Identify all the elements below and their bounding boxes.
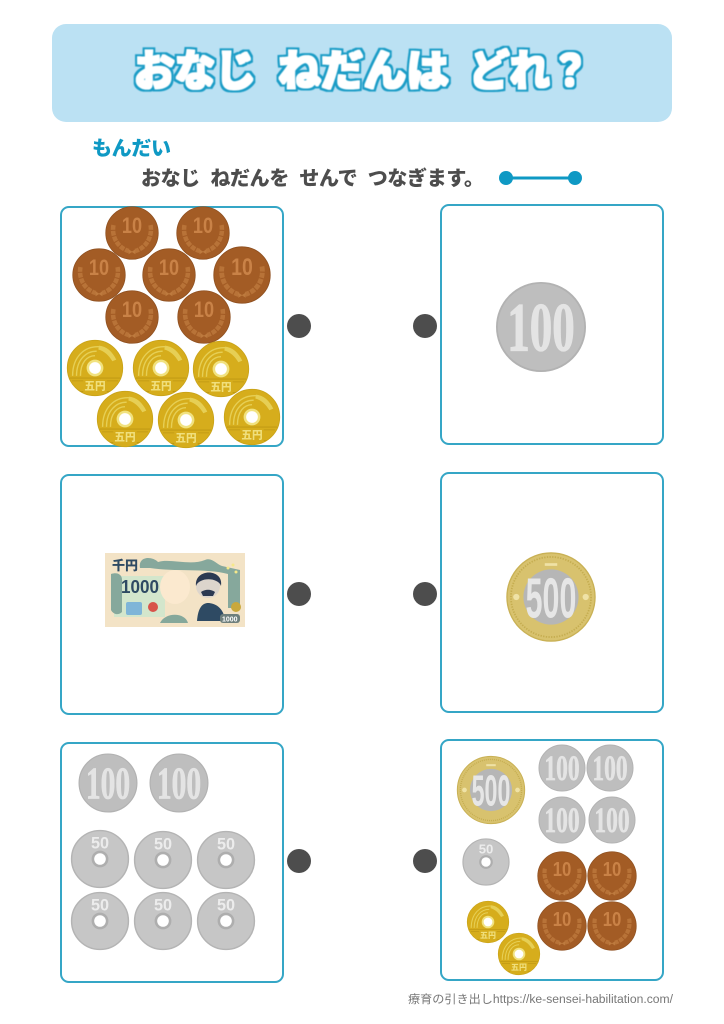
coin: 50 yen: 50: [91, 897, 109, 915]
title: おなじ: [134, 48, 256, 96]
coin: 10 yen: 10: [194, 297, 214, 322]
coin: 50 yen: [463, 839, 509, 885]
panel: 100 and 50 yen coins: [61, 743, 283, 982]
coin: 50 yen: [198, 893, 254, 949]
coin: 10 yen: [538, 852, 586, 900]
connection dot: [413, 582, 437, 606]
coin: 10 yen: 10: [231, 254, 253, 281]
coin: 10 yen: 10: [89, 255, 109, 280]
panel: 100 yen coin: [441, 205, 663, 444]
footer credit: 療育の引き出しhttps://ke-sensei-habilitation.com/: [408, 992, 674, 1006]
coin: 100 yen: 100: [594, 801, 630, 840]
coin: 50 yen: 50: [91, 835, 109, 853]
coin: 50 yen: 50: [154, 836, 172, 854]
title: ？: [551, 48, 589, 96]
coin: 500 yen: 500: [472, 768, 510, 816]
coin: 5 yen: 五円: [114, 432, 136, 444]
coin: 10 yen: 10: [603, 908, 621, 931]
coin: 5 yen: [498, 933, 540, 975]
coin: 10 yen: [538, 902, 586, 950]
coin: 10 yen: 10: [193, 213, 213, 238]
banknote: 1000 yen: 1000: [121, 577, 159, 597]
coin: 5 yen: 五円: [210, 382, 232, 394]
coin: 5 yen: 五円: [241, 430, 263, 442]
coin: 100 yen: 100: [544, 801, 580, 840]
coin: 10 yen: [106, 291, 158, 343]
coin: 50 yen: 50: [154, 897, 172, 915]
connection dot: [413, 849, 437, 873]
connection dot: [287, 849, 311, 873]
connection dot: [287, 582, 311, 606]
coin: 10 yen: 10: [603, 858, 621, 881]
title: どれ: [469, 48, 550, 96]
coin: 5 yen: [193, 341, 249, 397]
coin: 50 yen: [135, 893, 191, 949]
panel: 10 and 5 yen coins: [61, 207, 283, 448]
coin: 5 yen: [67, 340, 123, 396]
banknote: 1000 yen: [105, 553, 245, 627]
coin: 5 yen: 五円: [175, 433, 197, 445]
title banner: [52, 24, 672, 122]
coin: 10 yen: 10: [553, 858, 571, 881]
banknote: 1000 yen: 千円: [112, 558, 138, 573]
coin: 500 yen: [507, 553, 595, 641]
panel: 500 yen coin: [441, 473, 663, 712]
coin: 5 yen: [224, 389, 280, 445]
coin: 10 yen: 10: [159, 255, 179, 280]
coin: 100 yen: 100: [592, 749, 628, 788]
connection dot: [287, 314, 311, 338]
coin: 10 yen: [106, 207, 158, 259]
coin: 100 yen: 100: [157, 758, 201, 808]
coin: 50 yen: [135, 832, 191, 888]
coin: 5 yen: [133, 340, 189, 396]
coin: 500 yen: [457, 756, 525, 824]
title: ねだんは: [278, 48, 449, 96]
coin: 100 yen: 100: [544, 749, 580, 788]
banknote: 1000 yen: 1000: [222, 616, 238, 624]
coin: 5 yen: 五円: [84, 381, 106, 393]
coin: 5 yen: 五円: [511, 963, 527, 972]
coin: 5 yen: [97, 391, 153, 447]
panel: 1000 yen bill: [61, 475, 283, 714]
coin: 100 yen: 100: [507, 290, 575, 366]
coin: 5 yen: 五円: [480, 931, 496, 940]
coin: 100 yen: 100: [86, 758, 130, 808]
coin: 10 yen: 10: [122, 297, 142, 322]
title: [134, 48, 589, 96]
coin: 50 yen: 50: [217, 836, 235, 854]
coin: 50 yen: [198, 832, 254, 888]
connection dot: [413, 314, 437, 338]
coin: 5 yen: 五円: [150, 381, 172, 393]
coin: 10 yen: 10: [122, 213, 142, 238]
coin: 5 yen: [158, 392, 214, 448]
coin: 10 yen: [214, 247, 270, 303]
coin: 10 yen: [73, 249, 125, 301]
instruction text: おなじ ねだんを せんで つなぎます。: [141, 166, 484, 190]
coin: 10 yen: [588, 852, 636, 900]
sample connecting line: [499, 171, 582, 185]
coin: 5 yen: [467, 901, 509, 943]
coin: 10 yen: [143, 249, 195, 301]
heading: もんだい: もんだい: [92, 137, 171, 160]
coin: 500 yen: 500: [526, 566, 576, 630]
coin: 50 yen: 50: [479, 842, 493, 857]
coin: 10 yen: 10: [553, 908, 571, 931]
coin: 50 yen: [72, 893, 128, 949]
coin: 10 yen: [178, 291, 230, 343]
panel: mixed coins: [441, 740, 663, 980]
coin: 50 yen: 50: [217, 897, 235, 915]
coin: 10 yen: [588, 902, 636, 950]
coin: 10 yen: [177, 207, 229, 259]
coin: 50 yen: [72, 831, 128, 887]
